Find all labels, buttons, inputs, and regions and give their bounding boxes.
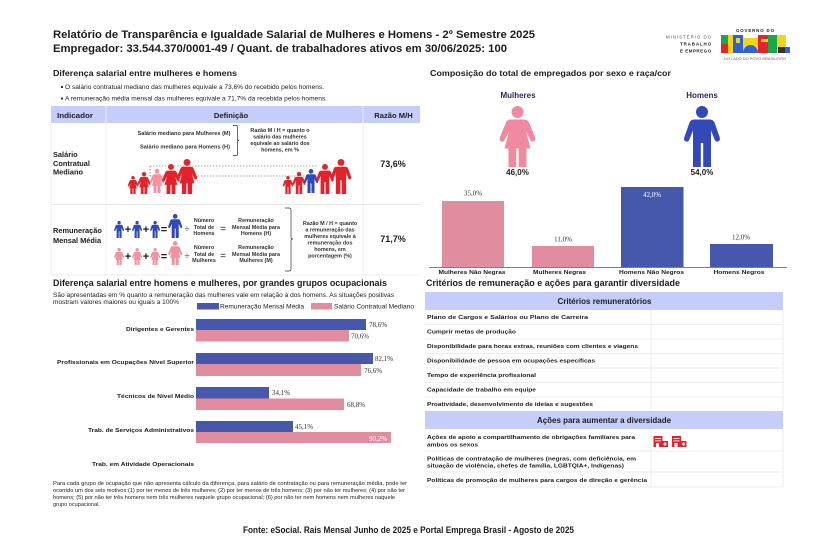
definition: salário mediano: Salário mediano para Homens (H): [140, 144, 230, 150]
panel: critérios remuneratórios: Plano de Cargos e Salários ou Plano de Carreira: [427, 315, 589, 321]
panel: ações para aumentar a diversidade: situação de violência, chefes de família, LGBTQIA+, Indígenas): [427, 464, 624, 470]
row label: remuneração mensal média: [53, 226, 102, 245]
panel: tabela de indicadores: [51, 106, 420, 275]
column chart: sexo e raça/cor: Mulheres Não Negras: [438, 270, 506, 276]
logo: Ministério do Trabalho e Emprego: [666, 34, 712, 54]
text block: nota do gráfico: mostram valores maiores ou iguais a 100%: [53, 299, 180, 306]
formula: mulheres: Número: [194, 245, 215, 251]
text block: nota de rodapé: ocorrido um dos seis motivos:(1) por ter menos de três mulheres; (2) por ter menos de três homens; (3) por não ter mulheres; (4) por não ter: [53, 488, 405, 494]
definition: razão remuneração: a remuneração das: [305, 228, 355, 234]
footer: fonte: Fonte: eSocial. Rais Mensal Junho de 2025 e Portal Emprega Brasil - Agosto de 2025: [243, 525, 574, 535]
icon: red building 1: [654, 436, 668, 447]
group: dirigentes e gerentes: 78,6%: [369, 321, 387, 329]
text block: nota de rodapé: homens; (5) por não ter três homens nem três mulheres naquele grupo ocupacional; (6) por não ter nem homens nem mulheres naquele: [53, 495, 395, 501]
formula: homens: Mensal Média para: [232, 225, 281, 231]
formula: homens: =: [161, 224, 167, 236]
formula: homens: Total de: [194, 225, 214, 231]
group: serviços administrativos: [88, 421, 391, 443]
panel: critérios remuneratórios: Proatividade, desenvolvimento de ideias e sugestões: [427, 402, 593, 408]
formula: mulheres: =: [220, 251, 226, 262]
column chart: sexo e raça/cor: [429, 187, 787, 276]
definition: salário mediano: salário das mulheres: [253, 134, 307, 140]
panel: ações para aumentar a diversidade: Políticas de contratação de mulheres (negras, com deficiência, em: [427, 456, 636, 462]
panel: critérios remuneratórios: Tempo de experiência profissional: [427, 373, 536, 379]
icon: red building 2: [672, 436, 686, 447]
group: atividade operacional: Trab. em Atividade Operacionais: [92, 462, 194, 468]
definition: razão remuneração: remuneração dos: [308, 240, 352, 246]
group: serviços administrativos: 45,1%: [295, 423, 313, 431]
column chart: sexo e raça/cor: 12,0%: [732, 234, 750, 242]
value: 73,6%: 73,6%: [380, 159, 406, 169]
panel: critérios remuneratórios: [425, 292, 783, 411]
chart legend: Salário Contratual Mediano: [334, 304, 415, 310]
formula: homens: Remuneração: [238, 218, 275, 224]
group: profissionais: 82,1%: [375, 355, 393, 363]
formula: mulheres: Mulheres (M): [239, 258, 273, 264]
logo: Ministério do Trabalho e Emprego: TRABALHO: [680, 42, 712, 46]
definition: razão remuneração: [285, 208, 358, 271]
icon: mulheres: Mulheres: [500, 91, 536, 100]
definition: razão remuneração: Razão M / H = quanto: [303, 221, 358, 227]
formula: homens: Número: [194, 218, 215, 224]
column chart: sexo e raça/cor: Homens Negros: [714, 270, 764, 276]
column chart: sexo e raça/cor: Homens Não Negros: [619, 270, 684, 276]
group: profissionais: Profissionais em Ocupações Nível Superior: [57, 360, 195, 366]
definition: salário mediano: Salário mediano para Mulheres (M): [138, 131, 231, 137]
icon: homens: [684, 91, 720, 177]
heading: diferença salarial: Diferença salarial entre mulheres e homens: [53, 68, 237, 78]
value: 71,7%: 71,7%: [380, 234, 406, 244]
row label: salário contratual mediano: Contratual: [53, 159, 90, 168]
logo: Governo do Brasil: DO LADO DO POVO BRASILEIRO: [724, 57, 786, 61]
header: razão: Razão M/H: [374, 111, 413, 120]
bar chart: grupos ocupacionais: [57, 319, 393, 468]
formula: homens: ÷: [185, 224, 190, 234]
header: indicador: Indicador: [57, 111, 93, 120]
text block: bullets: O salário contratual mediano das mulheres equivale a 73,6% do recebido pelos homens.: [65, 84, 324, 91]
formula: mulheres: Remuneração: [238, 245, 275, 251]
panel: ações para aumentar a diversidade: Ações para aumentar a diversidade: [537, 416, 672, 425]
formula: homens: [114, 214, 281, 238]
row label: remuneração mensal média: Remuneração: [53, 226, 102, 235]
formula: mulheres: ÷: [185, 251, 190, 261]
text block: nota do gráfico: São apresentadas em % quanto a remuneração das mulheres vale em relação à dos homens. As situações positivas: [53, 292, 394, 299]
row label: salário contratual mediano: Mediano: [53, 168, 83, 176]
formula: mulheres: [114, 241, 281, 265]
definition: salário mediano: homens, em %: [261, 148, 299, 154]
formula: homens: Homens (H): [241, 231, 271, 237]
icon: homens: 54,0%: [691, 168, 713, 177]
formula: mulheres: =: [161, 251, 167, 263]
row label: salário contratual mediano: [53, 150, 90, 176]
group: profissionais: [57, 353, 393, 376]
heading: diferença por grupos ocupacionais: Diferença salarial entre homens e mulheres, por grandes grupos ocupacionais: [53, 278, 387, 288]
formula: homens: Homens: [193, 231, 215, 237]
heading: composição: Composição do total de empregados por sexo e raça/cor: [430, 68, 672, 78]
pictogram: salário mediano, homens: [283, 159, 351, 194]
row label: salário contratual mediano: Salário: [53, 150, 78, 159]
title: [53, 29, 535, 55]
formula: mulheres: Total de: [194, 252, 214, 258]
definition: razão remuneração: homens, em: [314, 247, 346, 253]
icon: mulheres: 46,0%: [506, 168, 529, 177]
formula: mulheres: Mulheres: [192, 258, 216, 264]
group: serviços administrativos: Trab. de Serviços Administrativos: [88, 428, 194, 434]
panel: critérios remuneratórios: Disponibilidade para horas extras, reuniões com clientes e viagens: [427, 344, 638, 350]
definition: salário mediano: [138, 126, 310, 156]
pictogram: salário mediano, mulheres: [128, 159, 317, 194]
group: dirigentes e gerentes: 70,6%: [351, 332, 369, 340]
definition: salário mediano: equivale ao salário dos: [250, 141, 310, 147]
group: dirigentes e gerentes: [126, 319, 387, 342]
formula: homens: +: [125, 224, 131, 236]
panel: critérios remuneratórios: Cumprir metas de produção: [427, 330, 517, 336]
definition: razão remuneração: porcentagem (%): [308, 254, 352, 260]
chart legend: [197, 303, 415, 310]
formula: mulheres: +: [143, 251, 149, 263]
text block: nota de rodapé: Para cada grupo de ocupação que não apresenta cálculo da diferença, para salário de contratação ou para remuneração média, pode ter: [53, 481, 407, 487]
logo: Ministério do Trabalho e Emprego: E EMPREGO: [680, 48, 712, 54]
title: Relatório de Transparência e Igualdade Salarial de Mulheres e Homens - 2º Semestre 2025: [53, 29, 535, 41]
formula: homens: =: [220, 224, 226, 235]
panel: ações para aumentar a diversidade: ambos os sexos: [427, 442, 478, 448]
text block: nota de rodapé: [53, 481, 407, 508]
icon: homens: Homens: [686, 91, 718, 100]
panel: ações para aumentar a diversidade: Políticas de promoção de mulheres para cargos de direção e gerência: [427, 478, 648, 484]
formula: mulheres: Mensal Média para: [232, 252, 281, 258]
panel: ações para aumentar a diversidade: Ações de apoio a compartilhamento de obrigações familiares para: [427, 435, 636, 441]
column chart: sexo e raça/cor: Mulheres Negras: [533, 270, 586, 276]
formula: mulheres: +: [125, 251, 131, 263]
group: serviços administrativos: 90,2%: [369, 435, 387, 443]
column chart: sexo e raça/cor: 35,0%: [464, 190, 482, 198]
header: definição: Definição: [214, 111, 248, 120]
column chart: sexo e raça/cor: 11,0%: [554, 236, 572, 244]
heading: critérios: Critérios de remuneração e ações para garantir diversidade: [426, 278, 680, 288]
text block: bullets: A remuneração média mensal das mulheres equivale a 71,7% da recebida pelos homens.: [65, 96, 327, 102]
group: técnicos: [117, 387, 365, 410]
row label: remuneração mensal média: Mensal Média: [53, 236, 102, 245]
group: dirigentes e gerentes: Dirigentes e Gerentes: [126, 327, 194, 333]
group: técnicos: 34,1%: [272, 389, 290, 397]
panel: ações para aumentar a diversidade: [425, 411, 783, 487]
formula: homens: +: [143, 224, 149, 236]
logo: Governo do Brasil: GOVERNO DO: [736, 28, 775, 33]
group: técnicos: Técnicos de Nível Médio: [117, 394, 195, 400]
title: Empregador: 33.544.370/0001-49 / Quant. de trabalhadores ativos em 30/06/2025: 100: [53, 43, 507, 55]
text block: nota de rodapé: grupo ocupacional.: [53, 502, 100, 508]
definition: salário mediano: Razão M / H = quanto o: [250, 128, 310, 134]
icon: mulheres: [500, 91, 536, 177]
group: técnicos: 68,8%: [347, 401, 365, 409]
logo: Ministério do Trabalho e Emprego: MINISTÉRIO DO: [666, 34, 712, 40]
text block: bullets: [61, 84, 327, 102]
group: profissionais: 76,6%: [364, 367, 382, 375]
chart legend: Remuneração Mensal Média: [220, 304, 305, 310]
column chart: sexo e raça/cor: 42,0%: [643, 191, 661, 199]
panel: critérios remuneratórios: Critérios remuneratórios: [558, 297, 652, 306]
panel: critérios remuneratórios: Capacidade de trabalho em equipe: [427, 388, 537, 394]
logo: Governo do Brasil: [721, 28, 790, 61]
definition: razão remuneração: mulheres equivale à: [304, 234, 357, 240]
text block: nota do gráfico: [53, 292, 394, 306]
panel: critérios remuneratórios: Disponibilidade de pessoa em ocupações específicas: [427, 358, 595, 364]
